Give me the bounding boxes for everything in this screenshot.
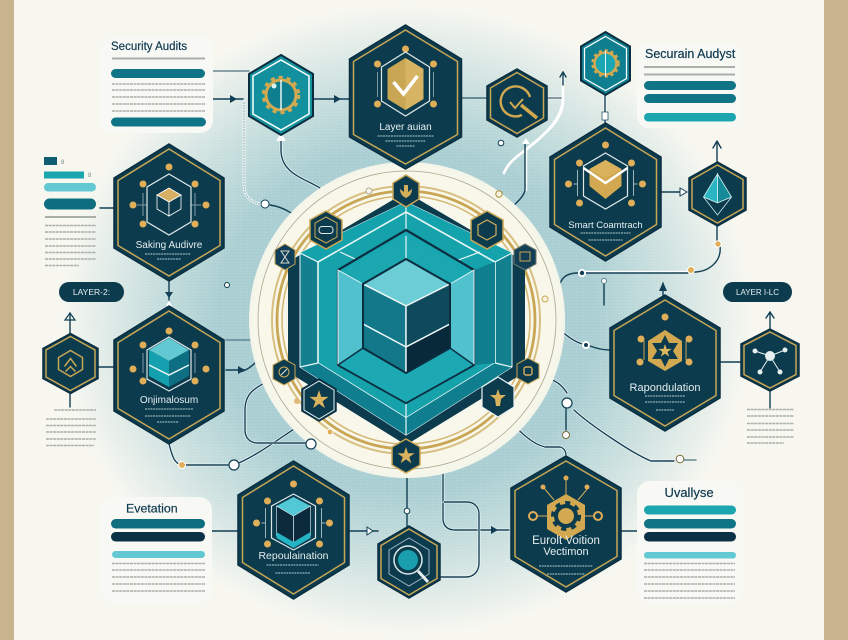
panel: left legend bars: 8 bbox=[88, 173, 92, 179]
title: Smart Coamtrach bbox=[568, 220, 643, 231]
panel: Security Audits bbox=[100, 37, 213, 133]
connector markers bbox=[178, 140, 721, 514]
icon: diamond bbox=[704, 174, 732, 215]
text block: left lines bbox=[46, 410, 96, 446]
node: Repopulation bbox=[238, 461, 349, 599]
pill: layer left: LAYER-2: bbox=[73, 287, 110, 297]
icon: magnifier check bbox=[501, 86, 537, 118]
panel: left legend bars: 8 bbox=[61, 160, 65, 166]
side band right bbox=[824, 0, 848, 640]
title: Layer auian bbox=[379, 122, 432, 133]
badge: lower right bbox=[482, 377, 514, 417]
pill: layer right: LAYER I-LC bbox=[736, 288, 779, 297]
teal hexagon body bbox=[300, 202, 512, 435]
badge: star bottom bbox=[392, 439, 420, 473]
connector lines bbox=[65, 71, 774, 577]
outer dark hexagon bbox=[288, 192, 525, 445]
pill: layer right bbox=[723, 282, 792, 302]
title: Onjimalosum bbox=[140, 395, 198, 406]
heading: Securain Audyst bbox=[645, 47, 736, 61]
node: magnifier bottom bbox=[378, 526, 440, 598]
icon: magnifier bbox=[394, 546, 428, 582]
icon: gear bbox=[592, 50, 618, 76]
ring disc bbox=[249, 162, 565, 478]
node: Optimization bbox=[114, 306, 224, 444]
node: gear left bbox=[249, 55, 313, 135]
inner dark-outlined hexagon bbox=[338, 230, 474, 403]
side band left bbox=[0, 0, 14, 640]
icon: home hexagon bbox=[58, 350, 82, 376]
title: Eurolt Voition bbox=[532, 535, 600, 547]
badge: star lower left bbox=[302, 379, 336, 421]
heading: Uvallyse bbox=[664, 485, 714, 500]
badge: upper left small bbox=[275, 244, 295, 270]
central hexagon stack with rings bbox=[249, 162, 565, 478]
text block: right lines bbox=[747, 410, 794, 443]
node: left small bbox=[43, 334, 98, 394]
thin ring bbox=[258, 171, 556, 469]
node: Saking Audivre bbox=[114, 144, 224, 281]
badge: upper left bbox=[310, 211, 342, 249]
title: Saking Audivre bbox=[136, 240, 203, 251]
node: Eurozone Voition bbox=[511, 456, 621, 592]
gold rings bbox=[272, 186, 540, 454]
panel: left legend bars bbox=[44, 157, 96, 266]
badge: top bbox=[393, 175, 419, 207]
panel: Uvallyse bbox=[637, 481, 743, 603]
node: check magnifier bbox=[487, 69, 547, 137]
title: Rapondulation bbox=[630, 382, 700, 394]
badge: upper right small bbox=[514, 244, 536, 270]
title: Repoulaination bbox=[258, 550, 329, 562]
node: Eurozone Voition: Vectimon bbox=[543, 546, 589, 558]
node: ethereum diamond bbox=[689, 162, 746, 226]
node: Smart Contract bbox=[550, 123, 661, 261]
pill: layer left bbox=[59, 282, 124, 302]
node: gear right bbox=[581, 32, 630, 95]
panel: Evetation bbox=[100, 497, 212, 603]
badge: lower right small bbox=[517, 358, 539, 384]
panel: Securain Audyst bbox=[637, 43, 742, 128]
node: Repondulation bbox=[610, 295, 720, 431]
badge: upper right bbox=[471, 211, 503, 249]
centre cube bbox=[363, 259, 450, 373]
node: network bbox=[741, 329, 799, 391]
heading: Evetation bbox=[126, 502, 178, 516]
icon: gear bbox=[264, 78, 298, 112]
node: Layer audit bbox=[350, 25, 462, 169]
badge: left small bbox=[273, 359, 295, 385]
icon: network bbox=[753, 348, 787, 374]
heading: Security Audits bbox=[111, 41, 187, 53]
